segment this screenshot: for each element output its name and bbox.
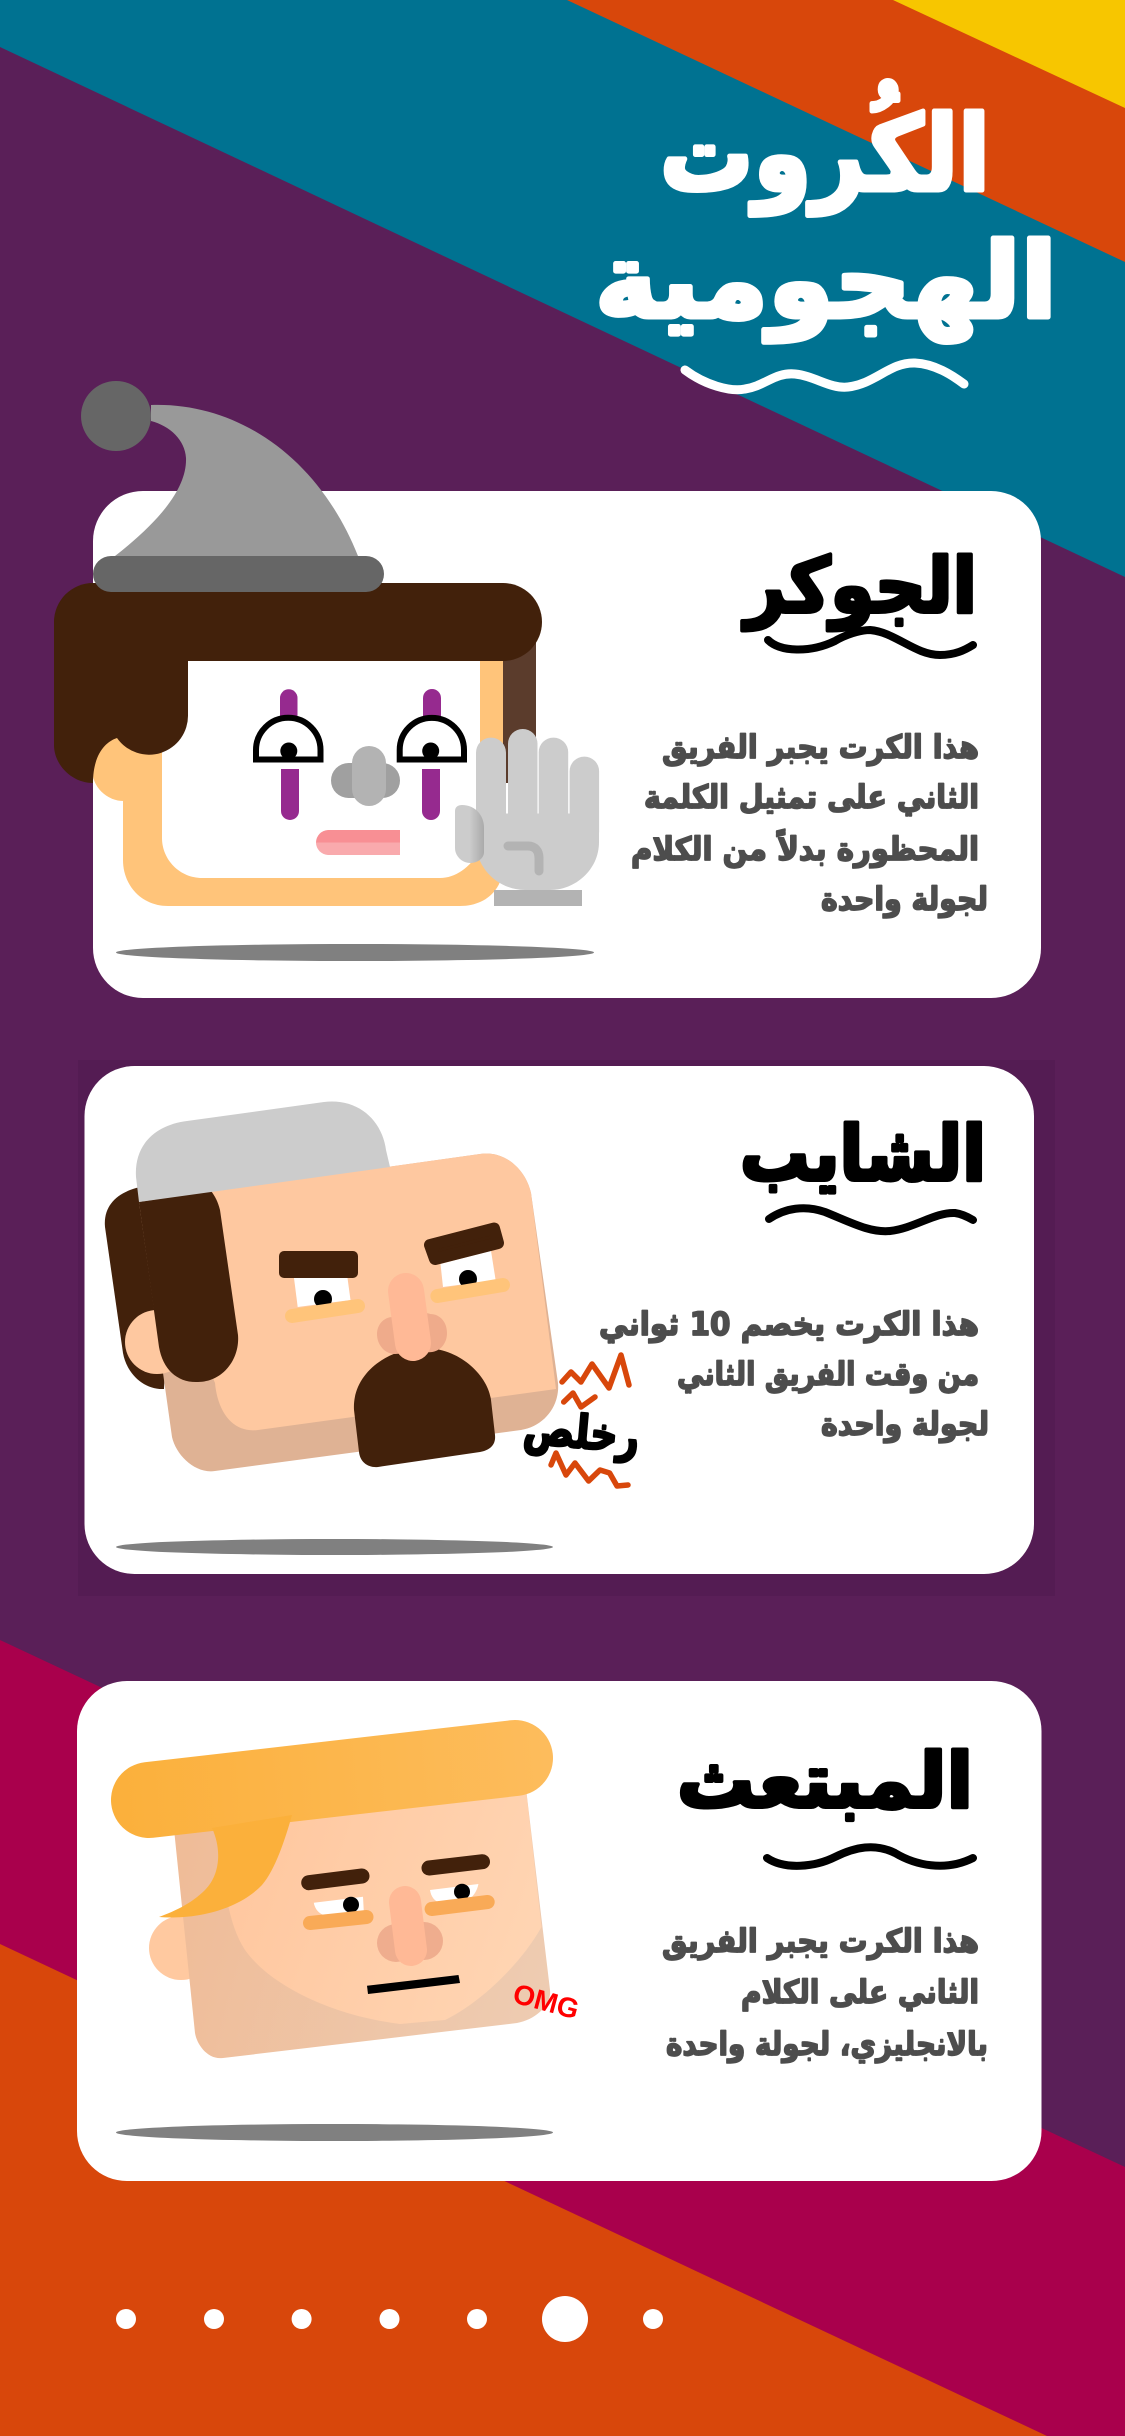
title wavy underline	[685, 363, 964, 390]
sheikh heading: الشايب	[740, 1109, 986, 1198]
left eye	[256, 718, 320, 760]
sheikh ground shadow	[116, 1539, 553, 1555]
face light	[139, 1153, 556, 1430]
joker description	[631, 728, 988, 918]
face light	[215, 1780, 542, 2024]
show-off description: الثاني على الكلام	[741, 1973, 979, 2011]
clown nose	[331, 746, 400, 806]
clown eye stripes	[280, 689, 441, 820]
face skin	[123, 661, 503, 906]
sound word: رخلص	[522, 1400, 642, 1464]
ear	[149, 1916, 213, 1980]
right eye	[400, 718, 464, 760]
nose	[377, 1902, 443, 1962]
ear	[92, 737, 156, 801]
panel: sheikh card	[84, 1066, 1034, 1574]
face shade base	[171, 1780, 550, 2058]
hat pompom	[81, 381, 151, 451]
illustration: sheikh	[105, 1102, 642, 1486]
panel: joker card	[54, 381, 1041, 998]
hat brim	[93, 556, 384, 592]
eyebrows	[309, 1862, 482, 1883]
eyebrows	[279, 1228, 498, 1278]
white cap	[136, 1102, 390, 1202]
show-off ground shadow	[116, 2124, 553, 2141]
moustache	[354, 1348, 495, 1467]
blond hair quiff	[149, 1758, 515, 1917]
white face paint	[162, 661, 480, 878]
ear	[125, 1310, 189, 1374]
pagination dots	[116, 2296, 663, 2342]
front hair	[139, 1191, 238, 1382]
joker description: هذا الكرت يجبر الفريق	[662, 728, 979, 766]
show-off description: بالانجليزي، لجولة واحدة	[666, 2025, 988, 2063]
show-off description: هذا الكرت يجبر الفريق	[662, 1922, 979, 1960]
show-off wavy underline	[767, 1847, 973, 1866]
right eye	[430, 1884, 478, 1903]
title: الكُروت	[660, 80, 990, 216]
jester hat	[115, 405, 358, 556]
mouth	[367, 1975, 460, 1994]
back hair band	[495, 637, 536, 783]
show-off description	[662, 1922, 988, 2063]
sheikh wavy underline	[769, 1208, 973, 1231]
illustration: show-off	[149, 1758, 582, 2058]
under-eye lines	[310, 1902, 488, 1923]
sheikh description: من وقت الفريق الثاني	[677, 1355, 979, 1393]
waving glove hand	[455, 729, 599, 906]
back hair	[105, 1187, 172, 1389]
OMG label: OMG	[510, 1978, 582, 2025]
joker description: الثاني على تمثيل الكلمة	[644, 778, 979, 816]
title: الهجومية	[595, 220, 1057, 342]
left eye	[314, 1897, 364, 1916]
show-off heading: المبتعث	[677, 1736, 973, 1825]
nose	[377, 1291, 447, 1354]
title	[595, 80, 1057, 390]
face shadow base	[139, 1153, 558, 1471]
joker heading: الجوكر	[741, 541, 977, 631]
joker wavy underline	[768, 630, 973, 655]
red zigzags	[551, 1355, 629, 1486]
left eye	[294, 1278, 350, 1308]
card 2 dark backdrop	[78, 1060, 1055, 1596]
clown mouth	[316, 830, 400, 855]
joker ground shadow	[116, 944, 594, 961]
right eye	[440, 1251, 496, 1288]
joker hair	[54, 583, 542, 783]
illustration: joker	[54, 381, 599, 906]
sheikh description: هذا الكرت يخصم 10 ثواني	[599, 1305, 979, 1343]
sheikh description: لجولة واحدة	[821, 1405, 989, 1443]
under-eye lines	[292, 1285, 503, 1316]
panel: show-off card	[77, 1681, 1042, 2181]
joker description: المحظورة بدلاً من الكلام	[631, 828, 979, 868]
sheikh description	[599, 1305, 989, 1443]
joker description: لجولة واحدة	[821, 880, 988, 918]
